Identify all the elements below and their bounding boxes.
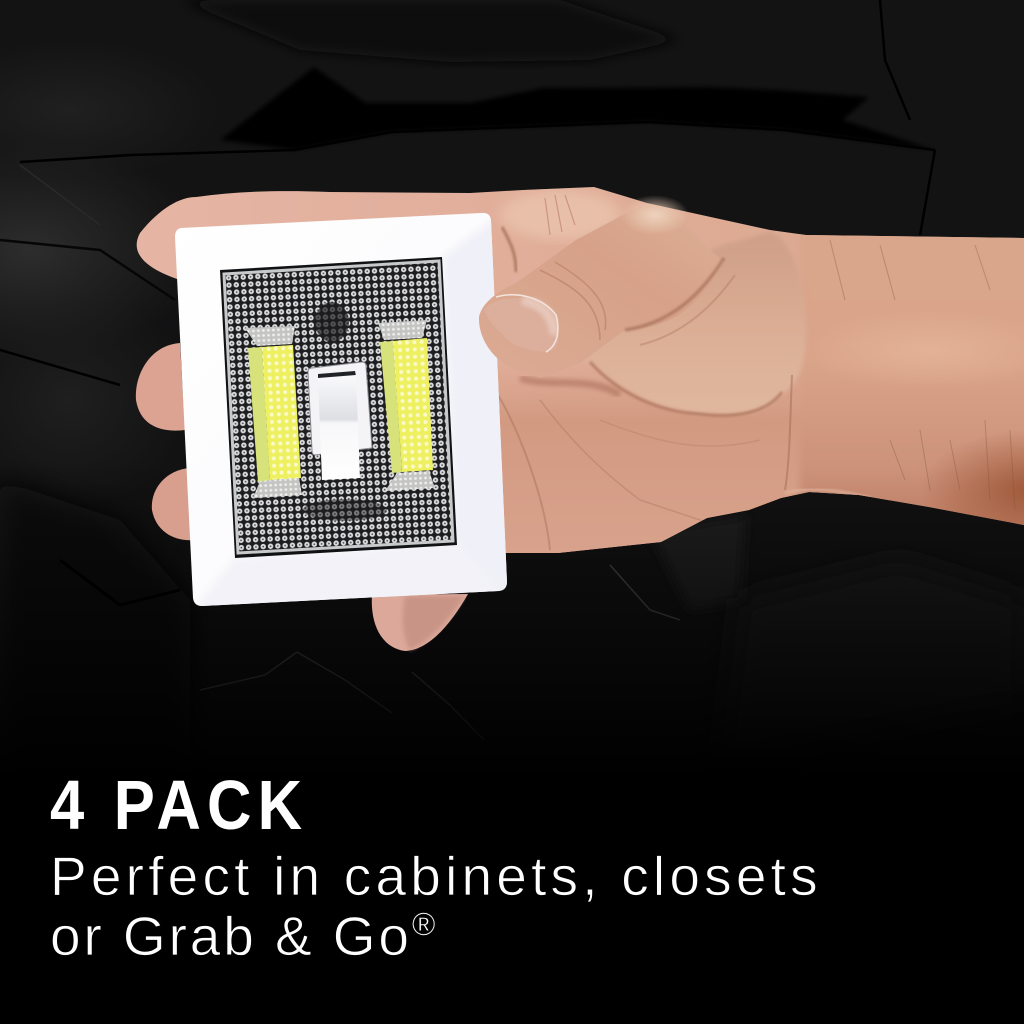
heading: 4 PACK	[50, 766, 308, 844]
arm and palm silhouette contents	[120, 180, 1024, 560]
cracks	[0, 0, 935, 605]
thenar under-crease	[590, 362, 782, 415]
palm lines	[495, 390, 550, 550]
dark band under rock ledge	[220, 67, 935, 150]
arm reddish shade	[936, 438, 1024, 525]
darker rock top	[180, 0, 680, 62]
palm lower tone	[498, 380, 810, 553]
brand mark	[303, 499, 387, 521]
thumb-base crease	[625, 258, 724, 330]
hand	[120, 180, 1024, 651]
switch light product	[175, 213, 515, 615]
wrist crease	[785, 375, 792, 490]
toggle switch	[308, 362, 372, 480]
knuckle highlight	[621, 195, 689, 235]
thumbnail	[484, 295, 559, 352]
perforated lens	[224, 261, 453, 553]
thumb in front of the switch	[479, 195, 735, 378]
white frame	[175, 213, 507, 606]
arm highlight	[868, 331, 991, 370]
right LED bar	[378, 320, 435, 491]
joint creases	[540, 262, 606, 340]
upper palm creases area	[500, 190, 620, 240]
lower right slab	[650, 515, 745, 610]
forearm hair	[830, 240, 1015, 510]
shadow below thumb	[520, 378, 620, 395]
subheading line 1: Perfect in cabinets, closets	[50, 845, 822, 907]
thumb shape	[479, 206, 724, 378]
web creases	[502, 227, 516, 272]
power icon	[315, 302, 349, 342]
forearm	[800, 225, 1024, 530]
left lower shadow	[0, 480, 190, 780]
frame soft bevel	[190, 215, 515, 615]
left LED bar	[245, 326, 302, 498]
dark panel	[220, 257, 457, 558]
lit left wedge	[0, 140, 200, 360]
thenar mound	[587, 232, 806, 414]
product photo: hand holding switch light on dark slate	[0, 0, 1024, 740]
fingers behind the switch	[136, 343, 185, 431]
subheading line 2: or Grab & Go®	[50, 905, 435, 967]
